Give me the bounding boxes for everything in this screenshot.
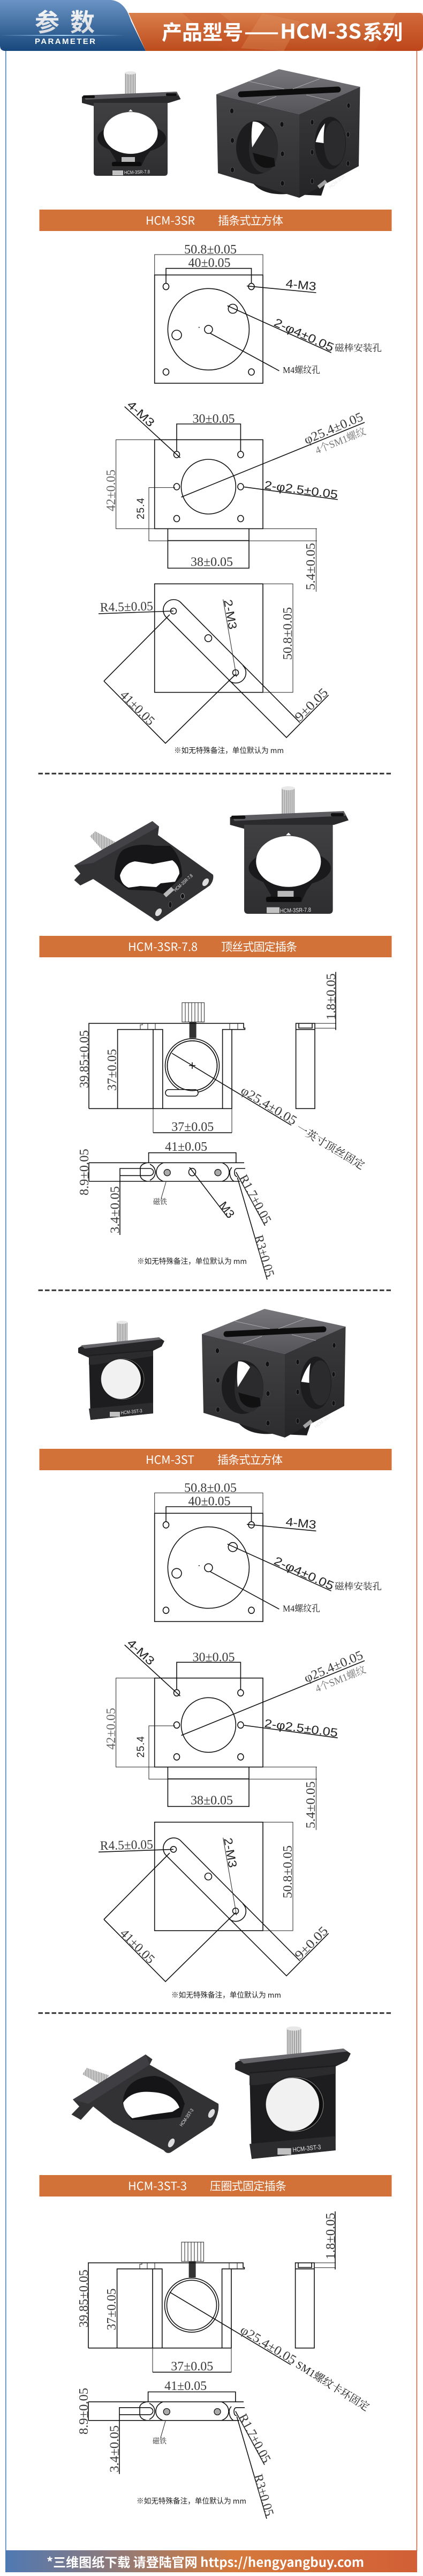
drawing: HCM-3ST-3 front view: 39.85±0.05 (77, 2269, 91, 2327)
drawing: HCM-3ST slot view: R4.5±0.05 (100, 1838, 153, 1853)
drawing: HCM-3ST side view: φ25.4±0.05 (302, 1648, 365, 1686)
photo: front holder (230, 786, 349, 914)
photo: insert holder: HCM-3SR-7.8 (124, 169, 150, 175)
label bar: HCM-3SR-7.8: HCM-3SR-7.8 (128, 939, 198, 955)
note: ※如无特殊备注，单位默认为 mm (137, 1256, 247, 1267)
drawing: HCM-3SR-7.8 front view: 39.85±0.05 (78, 1030, 92, 1088)
drawing: HCM-3ST side view: 25.4 (135, 1736, 147, 1758)
label bar: HCM-3SR (40, 210, 392, 231)
label bar: HCM-3ST-3: HCM-3ST-3 (128, 2178, 187, 2194)
note: ※如无特殊备注，单位默认为 mm (174, 745, 284, 756)
label bar: HCM-3SR: HCM-3SR (146, 212, 195, 228)
header banner (0, 0, 423, 51)
drawing: HCM-3ST-3 bottom view: 41±0.05 (164, 2379, 207, 2393)
divider (39, 773, 391, 775)
photo: press ring holder (78, 1321, 164, 1420)
footer bar (5, 2550, 417, 2572)
drawing: HCM-3SR plan view: 40±0.05 (188, 256, 230, 270)
drawing: HCM-3SR slot view: 50.8±0.05 (281, 607, 295, 660)
drawing: HCM-3SR-7.8 bottom view (78, 1140, 277, 1279)
title: 产品型号 (162, 16, 243, 46)
drawing: HCM-3ST-3 bottom view: R3±0.05 (251, 2473, 276, 2518)
heading: 参数: 参 数 (35, 3, 95, 39)
drawing: HCM-3SR side view: 4-M3 (125, 398, 157, 429)
drawing: HCM-3SR plan view: 2-φ4±0.05 (272, 316, 336, 354)
photo: angled holder (74, 821, 213, 921)
divider (39, 2012, 391, 2014)
drawing: HCM-3ST slot view: 9±0.05 (292, 1924, 331, 1963)
drawing: HCM-3SR-7.8 bottom view: M3 (216, 1199, 237, 1220)
photo: front holder: HCM-3SR-7.8 (280, 907, 311, 914)
title: 系列 (362, 16, 403, 46)
drawing: HCM-3ST side view (104, 1636, 368, 1830)
drawing: HCM-3ST plan view: 50.8±0.05 (184, 1481, 237, 1495)
product photos: HCM-3SR (82, 69, 360, 198)
photo: angled holder (72, 2054, 218, 2153)
photo: cube: HCM-3SR (328, 173, 346, 190)
drawing: HCM-3ST plan view: 2-φ4±0.05 (272, 1554, 336, 1592)
drawing: HCM-3ST-3 front view: 1.8±0.05 (324, 2213, 338, 2259)
drawing: HCM-3SR slot view: 9±0.05 (292, 686, 331, 724)
label bar: HCM-3SR-7.8 (40, 936, 392, 957)
drawing: HCM-3ST-3 bottom view: 磁铁 (153, 2437, 167, 2446)
photo: press ring holder: HCM-3ST-3 (120, 1408, 142, 1416)
drawing: HCM-3ST side view: 2-φ2.5±0.05 (263, 1716, 338, 1740)
drawing: HCM-3ST plan view: M4螺纹孔 (283, 1603, 320, 1613)
subheading: PARAMETER: PARAMETER (35, 37, 95, 46)
photo: front holder: HCM-3ST-3 (292, 2143, 321, 2154)
photo: cube: HCM-3ST (313, 1413, 332, 1430)
drawing: HCM-3ST plan view (155, 1481, 382, 1621)
drawing: HCM-3ST plan view: 4-M3 (285, 1515, 317, 1531)
drawing: HCM-3SR side view (104, 398, 368, 592)
label bar: HCM-3SR: 插条式立方体 (218, 212, 283, 228)
photo: insert holder (82, 71, 181, 176)
drawing: HCM-3SR side view: φ25.4±0.05 (302, 410, 365, 448)
label bar: HCM-3ST-3: 压圈式固定插条 (210, 2178, 286, 2194)
drawing: HCM-3SR side view: 42±0.05 (104, 470, 118, 511)
drawing: HCM-3SR side view: 5.4±0.05 (304, 543, 318, 590)
drawing: HCM-3ST side view: 30±0.05 (193, 1650, 235, 1664)
note: ※如无特殊备注，单位默认为 mm (171, 1990, 281, 2000)
label bar: HCM-3ST: 插条式立方体 (217, 1451, 283, 1468)
drawing: HCM-3SR slot view: 2-M3 (221, 599, 239, 630)
drawing: HCM-3ST slot view: 2-M3 (221, 1837, 239, 1868)
drawing: HCM-3SR-7.8 front view: 一英寸顶丝固定 (294, 1122, 367, 1172)
title: —— (244, 16, 279, 45)
drawing: HCM-3SR-7.8 bottom view: 41±0.05 (165, 1140, 207, 1154)
drawing: HCM-3ST slot view (99, 1822, 331, 1982)
drawing: HCM-3ST plan view: 磁棒安装孔 (335, 1581, 382, 1591)
product photos: HCM-3ST (78, 1309, 346, 1438)
drawing: HCM-3SR-7.8 bottom view: R1.7±0.05 (236, 1172, 274, 1226)
drawing: HCM-3SR side view: 38±0.05 (191, 555, 233, 569)
drawing: HCM-3SR slot view: 41±0.05 (117, 688, 157, 728)
product photos: HCM-3SR-7.8 (74, 786, 349, 921)
drawing: HCM-3ST side view: 5.4±0.05 (304, 1781, 318, 1828)
drawing: HCM-3SR slot view (99, 584, 331, 743)
drawing: HCM-3ST side view: 4-M3 (125, 1636, 157, 1668)
photo: front holder (235, 2027, 351, 2159)
drawing: HCM-3ST-3 bottom view: R1.7±0.05 (236, 2411, 273, 2466)
drawing: HCM-3SR plan view: 50.8±0.05 (184, 243, 237, 257)
note: ※如无特殊备注，单位默认为 mm (137, 2496, 246, 2506)
photo: cube (202, 1309, 346, 1438)
drawing: HCM-3SR plan view: 磁棒安装孔 (335, 343, 382, 353)
product photos: HCM-3ST-3 (72, 2027, 351, 2159)
divider (39, 1290, 391, 1291)
drawing: HCM-3ST-3 bottom view (77, 2379, 276, 2519)
label bar: HCM-3ST: HCM-3ST (146, 1451, 194, 1468)
drawing: HCM-3ST side view: 42±0.05 (104, 1708, 118, 1749)
drawing: HCM-3SR slot view: R4.5±0.05 (100, 599, 153, 615)
label bar: HCM-3ST-3 (40, 2175, 392, 2197)
drawing: HCM-3SR-7.8 bottom view: R3±0.05 (251, 1233, 277, 1278)
drawing: HCM-3SR-7.8 bottom view: 8.9±0.05 (78, 1149, 92, 1195)
drawing: HCM-3SR-7.8 bottom view: 3.4±0.05 (108, 1186, 122, 1233)
drawing: HCM-3SR-7.8 front view (78, 972, 367, 1172)
drawing: HCM-3ST-3 front view: φ25.4±0.05 (238, 2323, 299, 2367)
drawing: HCM-3ST slot view: 50.8±0.05 (281, 1845, 295, 1899)
drawing: HCM-3ST-3 front view: 37±0.05 (171, 2359, 213, 2373)
drawing: HCM-3ST-3 front view: 37±0.05 (105, 2288, 119, 2330)
photo: cube (216, 69, 360, 198)
drawing: HCM-3SR-7.8 front view: φ25.4±0.05 (238, 1084, 299, 1128)
drawing: HCM-3ST slot view: 41±0.05 (117, 1926, 157, 1967)
drawing: HCM-3ST-3 front view: SM1螺纹卡环固定 (293, 2358, 372, 2414)
photo: angled holder: HCM-3SR-7.8 (173, 873, 194, 892)
drawing: HCM-3ST-3 bottom view: 3.4±0.05 (108, 2425, 122, 2473)
drawing: HCM-3ST-3 front view (77, 2212, 372, 2414)
drawing: HCM-3ST plan view: 40±0.05 (188, 1494, 230, 1508)
title (162, 15, 403, 46)
drawing: HCM-3ST side view: 4个SM1螺纹 (314, 1664, 368, 1695)
photo: angled holder: HCM-3ST-3 (178, 2108, 194, 2127)
drawing: HCM-3SR-7.8 front view: 37±0.05 (105, 1049, 119, 1091)
drawing: HCM-3SR plan view: 4-M3 (285, 277, 317, 293)
drawing: HCM-3SR-7.8 front view: 37±0.05 (171, 1120, 214, 1134)
drawing: HCM-3ST-3 bottom view: 8.9±0.05 (77, 2388, 91, 2434)
drawing: HCM-3SR side view: 25.4 (135, 498, 147, 519)
footer bar: *三维图纸下载 请登陆官网 https://hengyangbuy.com (47, 2552, 364, 2571)
drawing: HCM-3SR side view: 30±0.05 (193, 412, 235, 426)
drawing: HCM-3SR side view: 4个SM1螺纹 (314, 426, 368, 457)
drawing: HCM-3ST side view: 38±0.05 (191, 1793, 233, 1807)
drawing: HCM-3SR plan view: M4螺纹孔 (283, 365, 320, 375)
drawing: HCM-3SR plan view (155, 243, 382, 383)
label bar: HCM-3ST (40, 1449, 392, 1470)
drawing: HCM-3SR-7.8 front view: 1.8±0.05 (324, 973, 338, 1020)
label bar: HCM-3SR-7.8: 顶丝式固定插条 (221, 939, 297, 955)
title: HCM-3S (280, 15, 361, 44)
drawing: HCM-3SR-7.8 bottom view: 磁铁 (153, 1197, 167, 1207)
drawing: HCM-3SR side view: 2-φ2.5±0.05 (263, 478, 338, 501)
